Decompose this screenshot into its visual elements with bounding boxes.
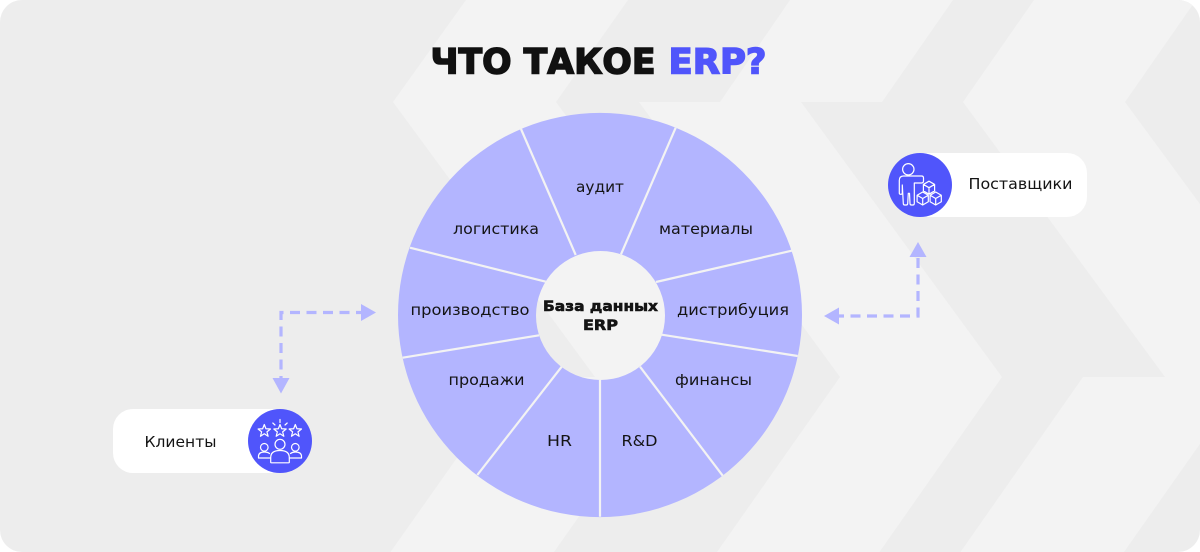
segment label: продажи: продажи [448,371,524,389]
title: ЧТО ТАКОЕ [430,42,656,82]
wheel ring [398,113,802,517]
card: suppliers [888,153,1087,217]
arrow: wheel to clients [272,304,376,394]
segment label: R&D: R&D [622,432,658,450]
center label: database: База данных [543,299,659,315]
arrow: wheel to suppliers [824,242,926,324]
title [430,42,766,82]
segment label: дистрибуция: дистрибуция [677,301,789,319]
label: suppliers: Поставщики [968,175,1072,193]
segment label: финансы: финансы [675,371,752,389]
segment dividers [403,128,798,517]
card: clients [113,409,312,473]
icon: person with boxes [888,153,952,217]
segment label: материалы: материалы [659,220,753,238]
segment label: HR: HR [547,432,572,450]
label: clients: Клиенты [144,433,216,451]
segment label: логистика: логистика [453,220,539,238]
center label: database [543,299,659,334]
title: ERP? [668,42,766,82]
icon: rated customers [248,409,312,473]
segment label: аудит: аудит [576,178,624,196]
segment label: производство: производство [410,301,530,319]
wheel diagram: ERP modules [398,113,802,517]
center label: database: ERP [583,318,618,334]
